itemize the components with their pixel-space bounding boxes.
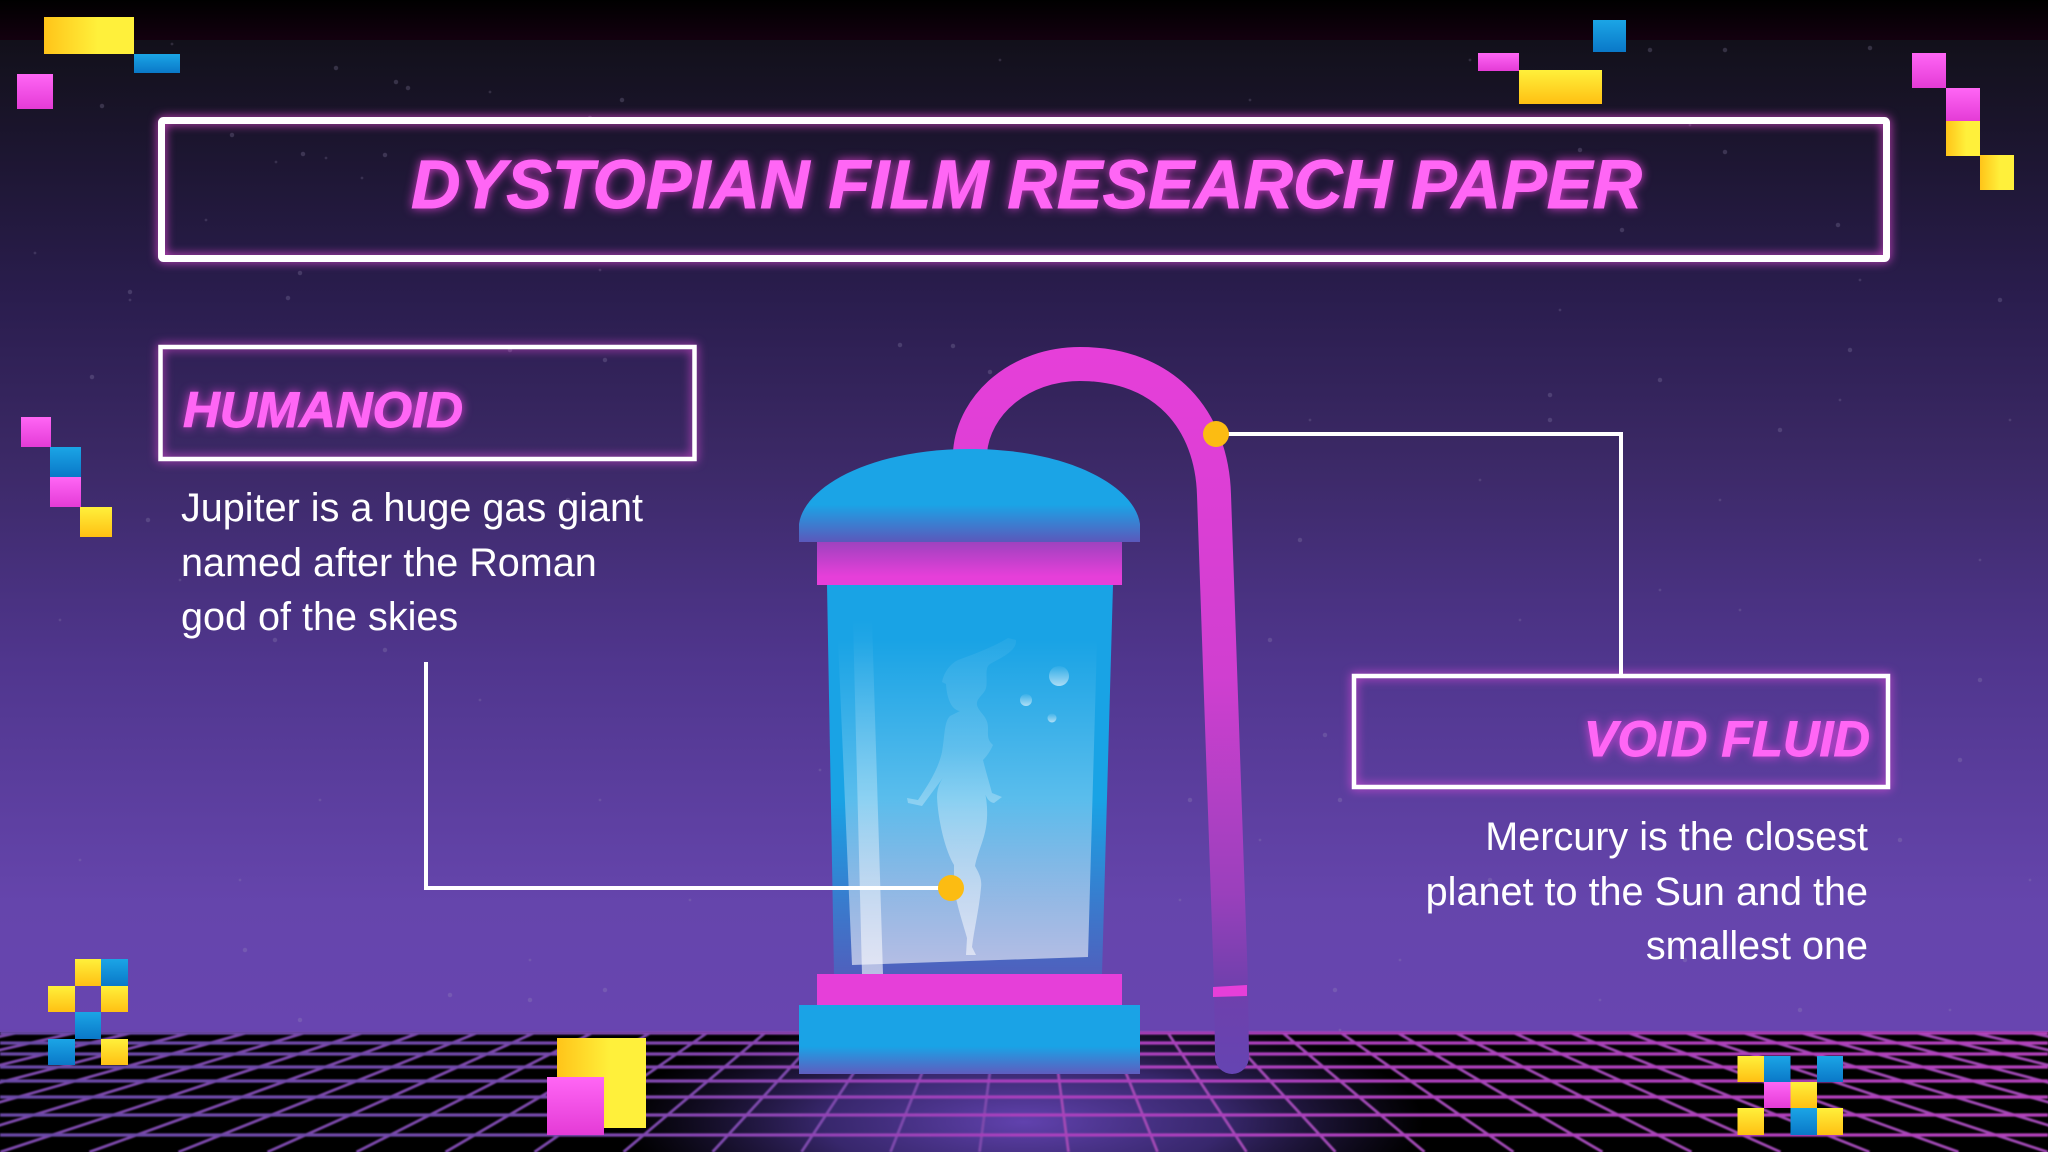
title: DYSTOPIAN FILM RESEARCH PAPER [411,146,1642,223]
capsule dome [799,449,1140,542]
tube [970,364,1247,1057]
marker dot [1203,421,1229,447]
bubbles [1020,666,1069,722]
bottom collar [817,974,1122,1005]
capsule glass [827,585,1113,974]
tube ring [1213,985,1247,997]
text: void fluid description: smallest one [1646,924,1868,968]
panel: void fluid [1354,676,1888,968]
title box [162,120,1886,258]
capsule tank [799,449,1140,1074]
pixel stair: top right [1912,53,2014,190]
text: humanoid description: Jupiter is a huge gas giant [181,486,643,530]
light strip [853,620,883,974]
text: humanoid description: god of the skies [181,595,458,639]
pixel blocks: bottom centre left [547,1038,646,1135]
heading: humanoid: HUMANOID [183,381,463,438]
text: void fluid description: planet to the Sun and the [1426,870,1868,914]
connector: void fluid [1203,421,1621,675]
text: void fluid description: Mercury is the closest [1485,815,1868,859]
pixel cluster: top left [17,17,180,109]
floor grid [0,1032,2048,1152]
text: humanoid description: named after the Roman [181,541,597,585]
humanoid silhouette [907,638,1016,955]
top collar [817,542,1122,585]
pixel cluster: bottom left [48,959,128,1065]
pixel cluster: bottom right [1738,1056,1843,1135]
pixel cluster: top centre right [1478,20,1626,104]
connector: humanoid [426,662,964,901]
pixel stair: left [21,417,112,537]
capsule base [799,1005,1140,1074]
light panel [838,640,1097,965]
panel: humanoid [160,347,694,639]
heading: void fluid: VOID FLUID [1584,710,1870,767]
marker dot [938,875,964,901]
